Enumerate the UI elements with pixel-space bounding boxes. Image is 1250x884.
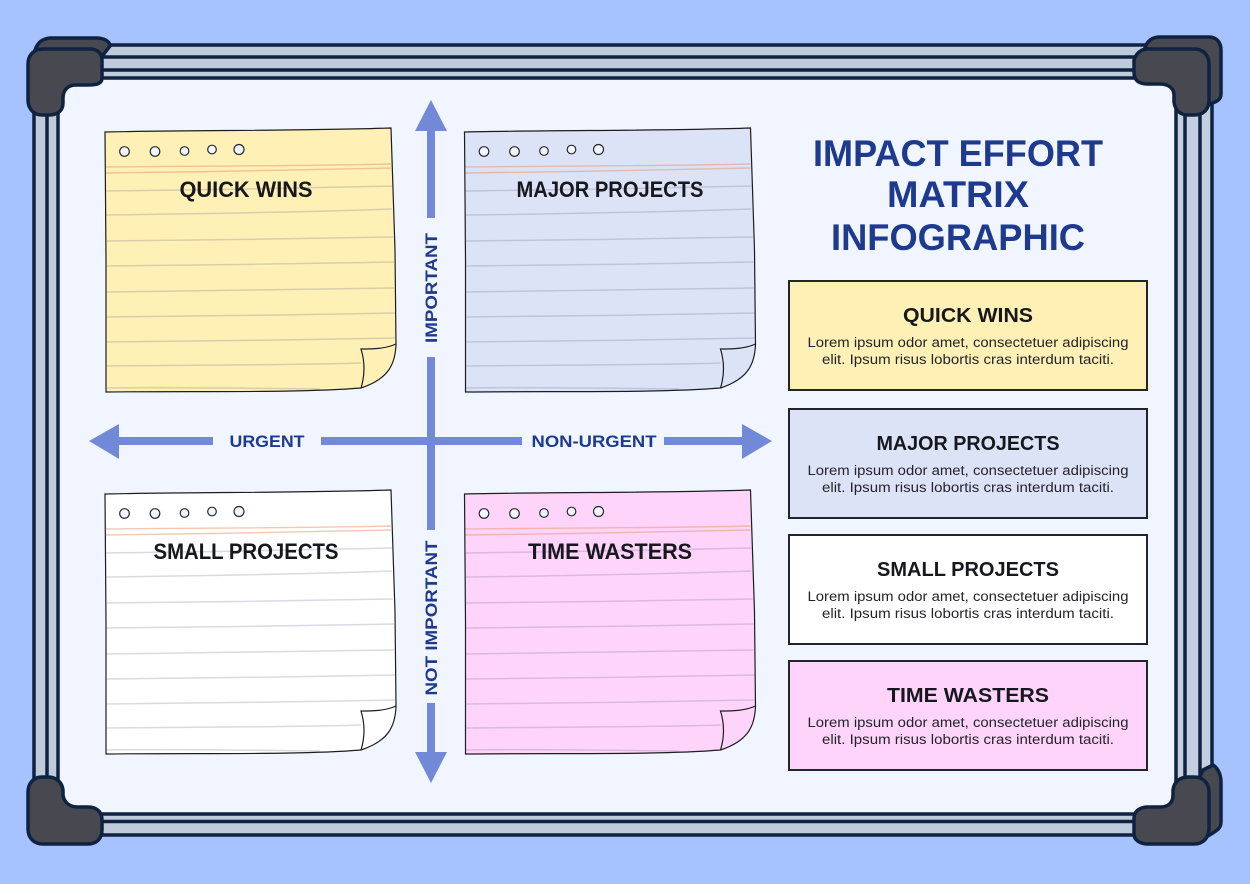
axis segment: centre horizontal	[321, 437, 522, 445]
title: INFOGRAPHIC	[831, 217, 1085, 258]
title	[813, 133, 1103, 258]
bottom frame rail	[100, 814, 1150, 835]
card: small projects: elit. Ipsum risus lobortis cras interdum taciti.	[822, 606, 1114, 621]
card: major projects: Lorem ipsum odor amet, consectetuer adipiscing	[808, 463, 1128, 478]
card: small projects: Lorem ipsum odor amet, consectetuer adipiscing	[808, 589, 1128, 604]
card: quick wins: QUICK WINS	[903, 305, 1033, 327]
note: quick wins	[105, 128, 396, 392]
axis label: urgent: URGENT	[230, 432, 305, 451]
whiteboard surface	[58, 78, 1176, 814]
card: major projects: elit. Ipsum risus lobortis cras interdum taciti.	[822, 480, 1114, 495]
corner: bottom right	[1134, 765, 1221, 844]
card: major projects	[789, 409, 1147, 518]
top frame rail	[100, 45, 1150, 78]
matrix axes	[89, 100, 772, 783]
note: time wasters	[464, 490, 756, 754]
corner: top left	[28, 38, 110, 115]
left frame rail	[34, 100, 58, 790]
card: time wasters: Lorem ipsum odor amet, consectetuer adipiscing	[808, 715, 1128, 730]
note heading: quick wins: QUICK WINS	[180, 177, 312, 202]
arrow: left, urgent	[89, 424, 213, 459]
title: IMPACT EFFORT	[813, 133, 1103, 174]
arrow: down, not important	[415, 703, 447, 783]
corner: top right	[1134, 37, 1221, 115]
right frame rail	[1176, 100, 1212, 790]
card: small projects	[789, 535, 1147, 644]
axis label: not important: NOT IMPORTANT	[422, 540, 441, 696]
note heading: time wasters: TIME WASTERS	[528, 539, 692, 564]
note: major projects	[464, 128, 756, 392]
axis segment: centre vertical	[427, 357, 435, 530]
note: small projects	[105, 490, 396, 754]
note heading: small projects: SMALL PROJECTS	[154, 539, 338, 564]
axis label: non-urgent: NON-URGENT	[532, 432, 657, 451]
title: MATRIX	[887, 174, 1029, 215]
card: time wasters: TIME WASTERS	[887, 685, 1049, 707]
arrow: right, non-urgent	[664, 424, 772, 459]
corner: bottom left	[28, 777, 102, 844]
card: time wasters: elit. Ipsum risus lobortis cras interdum taciti.	[822, 732, 1114, 747]
card: major projects: MAJOR PROJECTS	[876, 433, 1060, 455]
card: time wasters	[789, 661, 1147, 770]
card: quick wins	[789, 281, 1147, 390]
note heading: major projects: MAJOR PROJECTS	[516, 177, 704, 202]
arrow: up, important	[415, 100, 447, 218]
axis label: important: IMPORTANT	[422, 232, 441, 343]
card: quick wins: Lorem ipsum odor amet, consectetuer adipiscing	[808, 335, 1128, 350]
card: quick wins: elit. Ipsum risus lobortis cras interdum taciti.	[822, 352, 1114, 367]
card: small projects: SMALL PROJECTS	[877, 559, 1059, 581]
